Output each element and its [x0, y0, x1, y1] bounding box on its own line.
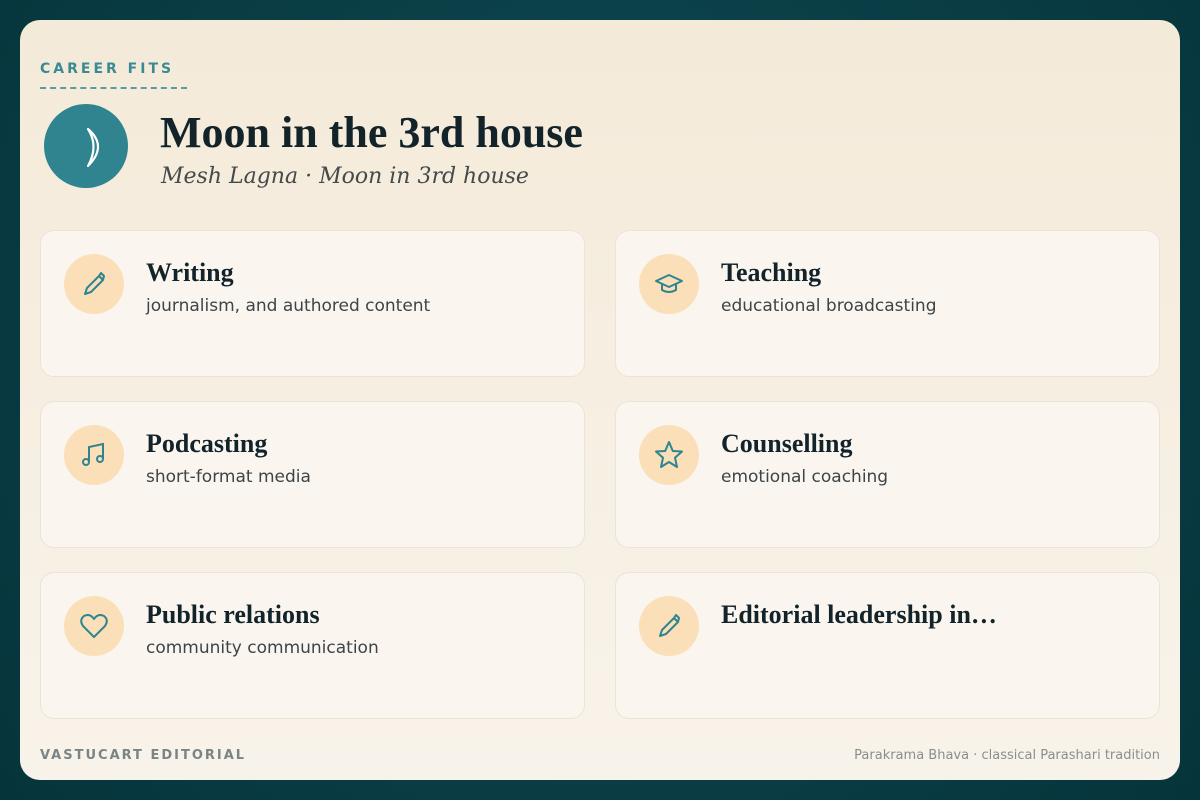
panel: counselling — [615, 401, 1160, 548]
panel: teaching: Teaching — [721, 258, 821, 287]
panel: writing — [40, 230, 585, 377]
panel: public relations: Public relations — [146, 600, 320, 629]
subtitle: Mesh Lagna · Moon in 3rd house — [161, 164, 529, 189]
panel: counselling: emotional coaching — [721, 467, 888, 487]
panel: podcasting: short-format media — [146, 467, 311, 487]
panel: counselling: Counselling — [721, 429, 852, 458]
panel: editorial leadership — [615, 572, 1160, 719]
panel: writing: Writing — [146, 258, 234, 287]
icon: music — [64, 425, 124, 485]
footer left: VASTUCART EDITORIAL — [40, 748, 246, 763]
footer right: Parakrama Bhava · classical Parashari tradition — [854, 748, 1160, 763]
icon: star — [639, 425, 699, 485]
panel: public relations — [40, 572, 585, 719]
panel: editorial leadership: Editorial leadership in… — [721, 600, 997, 629]
panel: teaching: educational broadcasting — [721, 296, 936, 316]
icon: graduation cap — [639, 254, 699, 314]
panel: writing: journalism, and authored content — [146, 296, 430, 316]
icon: pen — [64, 254, 124, 314]
panel: podcasting: Podcasting — [146, 429, 267, 458]
panel: teaching — [615, 230, 1160, 377]
title: Moon in the 3rd house — [160, 108, 583, 157]
panel: podcasting — [40, 401, 585, 548]
icon: heart — [64, 596, 124, 656]
eyebrow label: CAREER FITS — [40, 61, 174, 77]
panel: public relations: community communication — [146, 638, 379, 658]
icon: moon — [44, 104, 128, 188]
icon: pen — [639, 596, 699, 656]
